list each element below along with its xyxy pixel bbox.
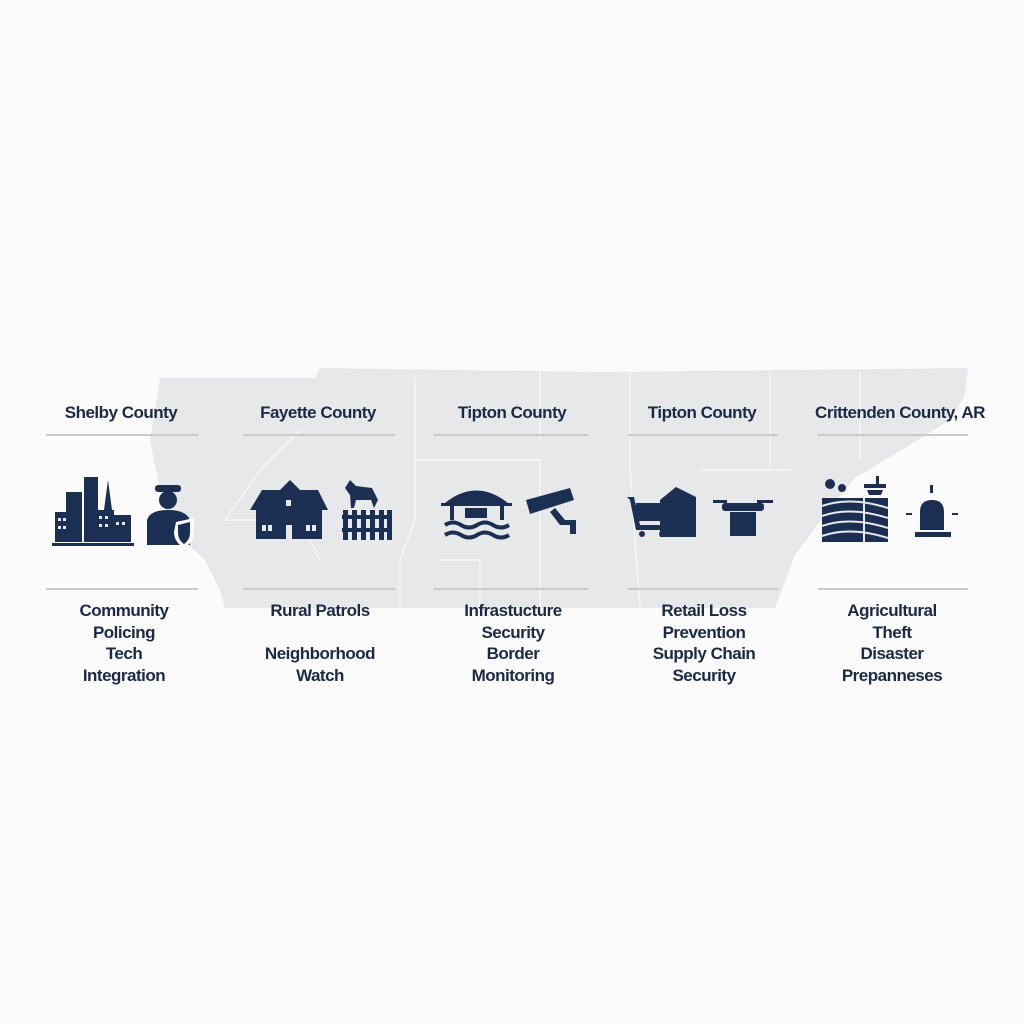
icon: cart building drone xyxy=(627,487,773,537)
text: Monitoring xyxy=(472,666,554,684)
text: Retail Loss xyxy=(661,601,747,620)
icon: bridge truck and camera xyxy=(441,488,576,538)
icon: farm field and siren xyxy=(822,476,958,542)
text: Disaster xyxy=(860,644,924,663)
text: Theft xyxy=(872,622,912,642)
bottom labels: Integration xyxy=(83,666,165,684)
text: Watch xyxy=(296,666,344,684)
text: Border xyxy=(487,644,539,663)
bottom labels: Tech xyxy=(106,644,142,663)
text: Prevention xyxy=(663,622,745,642)
text: Neighborhood xyxy=(265,644,375,663)
titles: Shelby County xyxy=(65,403,177,422)
icon: city and police officer xyxy=(52,477,194,548)
text: Tipton County xyxy=(648,403,756,422)
text: Rural Patrols xyxy=(270,601,370,620)
text: Agricultural xyxy=(847,601,937,620)
text: Security xyxy=(672,666,736,684)
bottom labels: Policing xyxy=(93,622,155,642)
bottom labels xyxy=(80,601,169,684)
bottom labels: Community xyxy=(80,601,168,620)
text: Prepanneses xyxy=(842,666,942,684)
icon: house and dog fence xyxy=(250,480,392,540)
text: Supply Chain xyxy=(653,644,755,663)
text: Crittenden County, AR xyxy=(815,403,985,422)
text: Tipton County xyxy=(458,403,566,422)
text: Infrastucture xyxy=(464,601,562,620)
text: Fayette County xyxy=(260,403,376,422)
text: Security xyxy=(481,622,545,642)
